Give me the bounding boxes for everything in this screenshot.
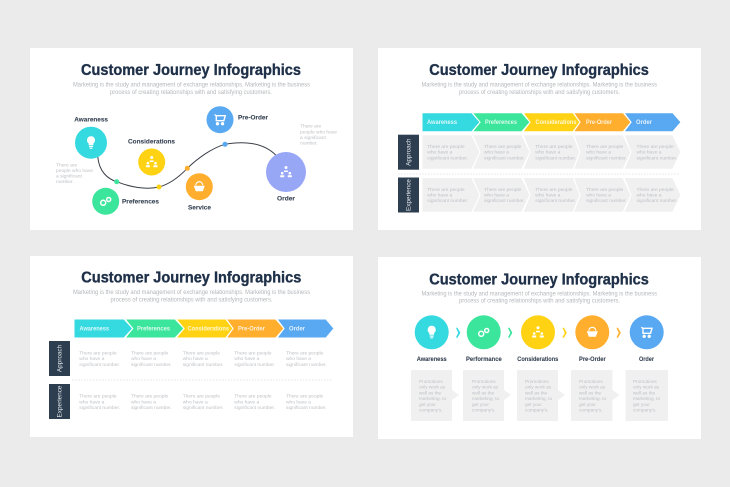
subtitle: Marketing is the study and management of exchange relationships. Marketing is the business — [422, 82, 657, 88]
subtitle — [73, 289, 310, 304]
approach text: significant number. — [131, 362, 172, 368]
box text: get your — [472, 402, 489, 407]
step: performance: Performance — [466, 356, 502, 363]
experience text: significant number. — [586, 198, 627, 204]
approach text: There are people — [535, 144, 573, 150]
experience text: who have a — [286, 399, 311, 405]
header chevrons — [74, 319, 334, 338]
row label: approach — [49, 341, 70, 376]
shaded row: approach — [422, 135, 681, 169]
header labels: Preferences — [485, 119, 517, 126]
box text: Promotions — [419, 379, 443, 384]
step: pre-order: Pre-Order — [579, 356, 606, 363]
header labels — [427, 119, 652, 126]
box text: well as the — [419, 390, 442, 395]
row label: experience: Experience — [406, 179, 412, 211]
header labels — [80, 326, 305, 332]
note: left — [56, 162, 93, 185]
node: considerations: Considerations — [128, 139, 175, 146]
experience text: There are people — [286, 394, 324, 400]
experience text: There are people — [427, 187, 465, 193]
step: order: Order — [639, 356, 654, 363]
experience text: There are people — [234, 394, 272, 400]
experience text: who have a — [79, 399, 105, 405]
step: performance — [466, 315, 502, 363]
approach text: There are people — [79, 350, 117, 356]
subtitle: process of creating relationships with and satisfying customers. — [110, 296, 273, 304]
header labels: Pre-Order — [238, 326, 265, 332]
panel: circle steps — [378, 257, 701, 439]
node: preferences: Preferences — [122, 198, 159, 205]
approach text: There are people — [183, 350, 220, 356]
subtitle: Marketing is the study and management of exchange relationships. Marketing is the business — [422, 290, 657, 297]
panel: chevron table, shaded — [378, 48, 701, 230]
box text: company's. — [579, 408, 603, 412]
header chevrons — [422, 113, 681, 132]
box text: only work as — [525, 385, 552, 390]
subtitle — [422, 82, 657, 96]
box text: only work as — [579, 385, 606, 390]
note: left: There are — [56, 162, 77, 168]
note: right — [300, 124, 337, 147]
approach text: There are people — [286, 350, 324, 356]
box text: marketing, to — [579, 396, 606, 401]
node: awareness — [74, 116, 108, 159]
note: right: a significant — [300, 135, 326, 141]
note: right: number. — [300, 141, 318, 147]
box text: Promotions — [633, 379, 657, 384]
experience text: significant number. — [286, 405, 327, 411]
shaded row: experience — [422, 178, 681, 212]
node: awareness: Awareness — [74, 116, 108, 123]
box text: well as the — [472, 390, 495, 395]
box text: get your — [525, 402, 542, 407]
approach text: There are people — [586, 144, 624, 150]
title: Customer Journey Infographics — [81, 270, 301, 287]
approach text: who have a — [183, 356, 208, 362]
approach text: There are people — [636, 144, 674, 150]
experience text: who have a — [586, 192, 611, 198]
approach text: who have a — [535, 150, 561, 156]
approach text: significant number. — [484, 155, 525, 161]
approach text: significant number. — [586, 155, 627, 161]
experience text: significant number. — [131, 405, 172, 411]
experience text: There are people — [484, 187, 522, 193]
step: awareness — [415, 315, 449, 363]
subtitle: Marketing is the study and management of exchange relationships. Marketing is the business — [73, 82, 310, 88]
box text: company's. — [525, 408, 549, 412]
header labels: Awareness — [80, 326, 109, 332]
experience text: who have a — [234, 399, 260, 405]
subtitle — [73, 82, 310, 96]
approach text: who have a — [286, 356, 311, 362]
box text: marketing, to — [472, 396, 499, 401]
note: left: number. — [56, 179, 74, 185]
step: order — [630, 315, 664, 363]
approach text: significant number. — [535, 155, 576, 161]
approach text: significant number. — [286, 362, 327, 368]
note: left: people who have — [56, 168, 93, 174]
subtitle: process of creating relationships with and satisfying customers. — [459, 89, 620, 96]
box text: marketing, to — [525, 396, 552, 401]
subtitle: process of creating relationships with and satisfying customers. — [459, 298, 620, 305]
approach text: who have a — [131, 356, 156, 362]
box text: marketing, to — [633, 396, 660, 401]
approach text: There are people — [131, 350, 169, 356]
experience text: significant number. — [484, 198, 525, 204]
step: considerations — [517, 315, 558, 363]
header labels: Considerations — [188, 326, 229, 332]
node: pre-order — [206, 106, 268, 133]
experience text: significant number. — [636, 198, 677, 204]
experience text: who have a — [427, 192, 453, 198]
arrows between steps — [456, 328, 621, 338]
box text: marketing, to — [419, 396, 446, 401]
approach text: There are people — [234, 350, 272, 356]
journey curve — [98, 143, 276, 188]
experience text: who have a — [183, 399, 208, 405]
experience text: There are people — [131, 394, 169, 400]
note: right: There are — [300, 124, 321, 130]
experience text: There are people — [586, 187, 624, 193]
box text: only work as — [633, 385, 660, 390]
row label: approach — [398, 135, 419, 170]
experience text: who have a — [484, 192, 509, 198]
header labels: Order — [636, 119, 652, 126]
experience text: significant number. — [79, 405, 120, 411]
experience text — [79, 394, 327, 411]
approach text: significant number. — [183, 362, 223, 368]
text boxes — [411, 370, 668, 421]
experience text: There are people — [79, 394, 117, 400]
box text: well as the — [579, 390, 602, 395]
box text: company's. — [419, 408, 443, 412]
experience text: who have a — [636, 192, 662, 198]
approach text: who have a — [586, 150, 611, 156]
approach text: who have a — [484, 150, 509, 156]
note: left: a significant — [56, 174, 82, 180]
node: preferences — [92, 188, 159, 215]
node: service: Service — [188, 204, 211, 211]
approach text: who have a — [427, 150, 453, 156]
approach text: who have a — [636, 150, 662, 156]
box text: get your — [633, 402, 650, 407]
approach text: significant number. — [427, 155, 468, 161]
approach text: significant number. — [636, 155, 677, 161]
node: considerations — [128, 139, 175, 176]
experience text: who have a — [131, 399, 156, 405]
row label: approach: Approach — [406, 138, 412, 166]
row label: experience — [49, 384, 70, 419]
subtitle: Marketing is the study and management of exchange relationships. Marketing is the business — [73, 289, 310, 296]
subtitle — [422, 290, 657, 305]
experience text: significant number. — [535, 198, 576, 204]
experience text — [427, 187, 677, 204]
panel: curved journey — [30, 48, 353, 230]
experience text: There are people — [636, 187, 674, 193]
subtitle: process of creating relationships with and satisfying customers. — [110, 89, 272, 96]
box text: only work as — [472, 385, 499, 390]
panel: chevron table, plain — [30, 256, 353, 437]
node: order: Order — [277, 195, 295, 202]
approach text: There are people — [427, 144, 465, 150]
experience text: who have a — [535, 192, 561, 198]
approach text — [79, 350, 327, 368]
header labels: Preferences — [137, 326, 170, 332]
step: awareness: Awareness — [417, 356, 447, 363]
approach text: who have a — [234, 356, 260, 362]
header labels: Order — [289, 326, 305, 332]
box text: well as the — [525, 390, 548, 395]
box text: Promotions — [579, 379, 603, 384]
approach text: significant number. — [79, 362, 120, 368]
step: pre-order — [575, 315, 609, 363]
approach text: significant number. — [234, 362, 275, 368]
node: order — [266, 152, 306, 202]
approach text — [427, 144, 677, 161]
box text: company's. — [633, 408, 657, 412]
box text: well as the — [633, 390, 656, 395]
box text: Promotions — [525, 379, 549, 384]
experience text: There are people — [535, 187, 573, 193]
row label: experience: Experience — [56, 385, 64, 417]
row label: experience — [398, 178, 419, 212]
box text: get your — [579, 402, 596, 407]
box text: Promotions — [472, 379, 496, 384]
header labels: Awareness — [427, 119, 457, 126]
box text: company's. — [472, 408, 496, 412]
approach text: who have a — [79, 356, 105, 362]
approach text: There are people — [484, 144, 522, 150]
box text: only work as — [419, 385, 446, 390]
header labels: Pre-Order — [586, 119, 612, 126]
experience text: There are people — [183, 394, 220, 400]
curve markers — [114, 142, 228, 190]
node: service — [186, 173, 213, 211]
experience text: significant number. — [183, 405, 223, 411]
row label: approach: Approach — [56, 344, 64, 372]
title: Customer Journey Infographics — [81, 62, 301, 79]
header labels: Considerations — [536, 119, 577, 126]
note: right: people who have — [300, 129, 337, 135]
node: pre-order: Pre-Order — [238, 115, 268, 122]
title: Customer Journey Infographics — [429, 271, 649, 288]
box text: get your — [419, 402, 436, 407]
title: Customer Journey Infographics — [429, 62, 649, 79]
step: considerations: Considerations — [517, 356, 558, 363]
experience text: significant number. — [427, 198, 468, 204]
experience text: significant number. — [234, 405, 275, 411]
box text — [419, 379, 660, 412]
